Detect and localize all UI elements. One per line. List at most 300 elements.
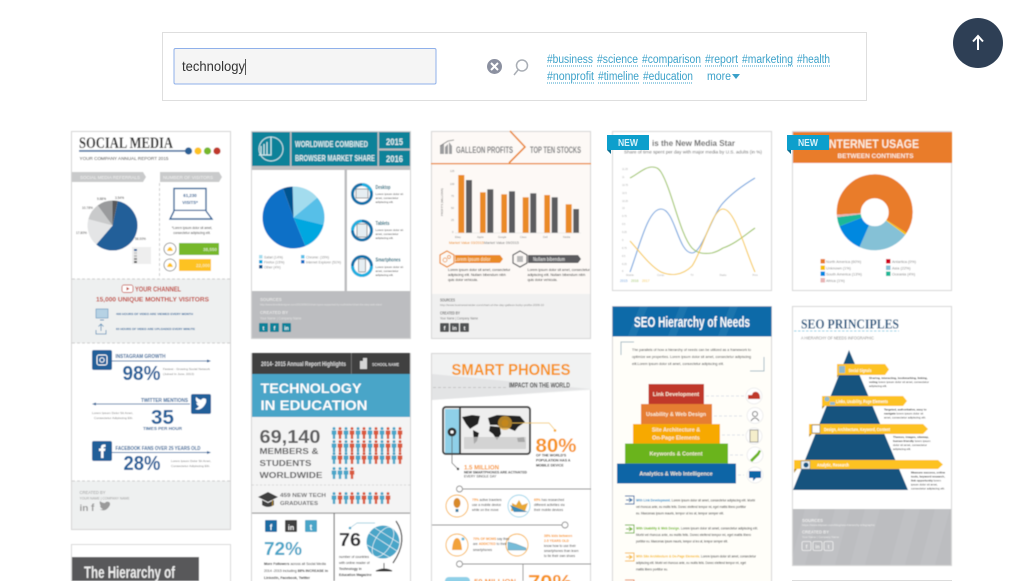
ribbon: design, architecture, keyword, content: Themes, images, sitemap, xyxy=(893,435,929,439)
hashtag links: #timeline xyxy=(598,71,639,83)
list: usability and web design: porttitor eu. Maecenas ipsum mauris, tempor ut leo at, tempor semper elit. xyxy=(636,540,728,544)
heading: technology in education: IN EDUCATION xyxy=(260,398,368,413)
bar chart: stocks xyxy=(440,169,581,245)
header band: 2015 xyxy=(386,137,403,147)
stat: new tech graduates: 459 NEW TECH xyxy=(280,493,326,499)
footer: sources: t xyxy=(263,326,265,332)
callout: lorem ipsum dolor: Lorem ipsum dolor xyxy=(454,257,491,263)
callout: lorem ipsum dolor xyxy=(440,251,511,282)
search panel xyxy=(162,32,866,100)
ribbon: design, architecture, keyword, content xyxy=(809,424,931,452)
header: galleon profits, top ten stocks xyxy=(431,131,591,164)
ribbon: design, architecture, keyword, content: adipiscing elit. xyxy=(893,447,911,451)
stat: facebook fans: Lorem Ipsum Dolor Sit Amet, xyxy=(171,459,211,463)
stat: facebook fans: 28% xyxy=(124,453,161,475)
pyramid connector lines xyxy=(706,396,744,475)
list: site architecture: mattis libero porttitor eu. xyxy=(636,568,668,572)
illustration: tablet with world map xyxy=(443,407,530,454)
bar chart: stocks: Cisco xyxy=(520,235,527,239)
card: browser market share xyxy=(252,132,410,338)
stat: yellow bar: 22,000 xyxy=(196,263,210,268)
stat: twitter mentions xyxy=(92,394,211,431)
y axis labels: 10.25 xyxy=(622,200,629,203)
chart legend: 2017 xyxy=(642,279,650,283)
device: smartphones: adipiscing elit. xyxy=(376,273,394,277)
card: SEO hierarchy of needs xyxy=(612,306,772,581)
stat row: travelers and research: their mobile devices xyxy=(534,508,563,512)
title rule with coloured dots xyxy=(79,147,221,155)
footer: sources: Your Name | Company Name xyxy=(802,535,839,539)
list: site architecture: With Site Architecture & On-Page Elements. Lorem ipsum dolor sit amet, consectetur xyxy=(636,554,757,558)
device: smartphones: amet, consectetur xyxy=(376,269,399,273)
stat: twitter mentions: TIMES PER HOUR xyxy=(143,426,183,431)
ribbon: analytic, research: Analytic, Research xyxy=(817,462,849,468)
stat row: moms and kids: 70% OF MOMS say they xyxy=(473,537,510,541)
ribbon: links, usability, page elements: amet, consectetur adipiscing elit. xyxy=(884,416,926,420)
ribbon: number of visitors: NUMBER OF VISITORS xyxy=(163,175,213,180)
y axis labels: 8.75 xyxy=(622,247,627,250)
stat row: travelers and research: while on the move xyxy=(472,508,499,512)
list: link development: eu. Maecenas ipsum mauris, tempor ut leo at, tempor semper elit. xyxy=(636,512,724,516)
search input xyxy=(174,48,436,84)
footer: sources: t xyxy=(828,544,830,550)
footer: created by xyxy=(72,481,230,529)
stat: instagram growth: INSTAGRAM GROWTH xyxy=(116,354,166,360)
pie labels and legend: 17.80% xyxy=(76,231,87,235)
card: smart phones xyxy=(432,354,591,581)
stat: 80 percent: 80% xyxy=(536,436,577,457)
header: internet usage xyxy=(793,132,952,163)
stat: facebook fans: Consectetur Adipiscing Elit. xyxy=(171,464,210,468)
icon: clear search xyxy=(487,59,502,74)
heading: smart phones: SMART PHONES xyxy=(452,362,571,379)
header: SEO hierarchy of needs: SEO Hierarchy of Needs xyxy=(634,314,750,331)
pyramid of needs: Link Development xyxy=(653,392,699,398)
footer: sources: Your Name | Company Name xyxy=(260,316,302,320)
footer: sources: http://www.businessinsider.com/chart-of-the-day-galleon-lucky-profits-2009-10 xyxy=(440,303,544,307)
bar chart: stocks: 50 xyxy=(451,206,454,210)
y axis labels: 10.75 xyxy=(622,184,629,187)
bar chart: stocks: 25 xyxy=(451,218,454,222)
device: tablets: Tablets xyxy=(376,221,390,227)
y axis labels: 11.25 xyxy=(622,168,628,171)
badge: new xyxy=(607,135,649,154)
card: next thumbnail edge xyxy=(792,580,952,581)
footer: sources xyxy=(252,291,410,338)
footer: sources: f xyxy=(444,326,446,332)
stat: green bar: 38,550 xyxy=(203,247,217,252)
followers text xyxy=(264,562,328,580)
hashtag links xyxy=(547,54,830,83)
pie chart: browsers xyxy=(278,202,309,233)
stat: new tech graduates: GRADUATES xyxy=(280,501,318,507)
callout: nullam bibendum: Nullam bibendum xyxy=(533,257,565,263)
header band: WORLDWIDE COMBINED xyxy=(295,139,368,149)
pyramid of needs: On-Page Elements xyxy=(652,436,700,442)
hashtag links: #report xyxy=(705,54,739,66)
header band: 2016 xyxy=(386,154,403,164)
footer: sources: Your Name | Company Name xyxy=(440,316,478,320)
header: internet usage: INTERNET USAGE xyxy=(826,139,919,151)
callout line: map to 80 percent xyxy=(512,423,556,432)
ribbon: design, architecture, keyword, content: dolor sit amet, consectetur xyxy=(893,443,927,447)
pyramid of needs: Site Architecture & xyxy=(652,428,700,434)
hashtag links: more xyxy=(707,71,731,83)
header: SEO hierarchy of needs xyxy=(612,306,772,336)
stat: yellow bar xyxy=(164,259,211,271)
list: link development: vel rhoncus ante, eu mollis felis. Donec eleifend tempor mi, eget mattis libero porttitor xyxy=(636,505,747,509)
device: smartphones: Smartphones xyxy=(376,258,400,264)
icon: magnifier xyxy=(514,60,528,75)
header band xyxy=(252,132,410,170)
donut legend: North America (60%) xyxy=(826,260,862,264)
search input: technology xyxy=(182,58,245,74)
80 percent caption: POPULATION HAS A xyxy=(536,458,571,462)
header background wedge xyxy=(432,354,591,400)
80 percent caption: MOBILE DEVICE xyxy=(536,464,564,468)
chart legend: 2015 xyxy=(620,279,628,283)
ribbon: analytic, research xyxy=(794,460,945,490)
pie legend xyxy=(259,255,341,270)
hashtag links: #marketing xyxy=(742,54,793,66)
stat row: moms and kids: are ADDICTED to their xyxy=(473,542,508,546)
stat: 76 countries xyxy=(339,523,375,577)
stat: 76 countries: Technology in xyxy=(339,567,362,571)
stat: 50 million xyxy=(445,577,516,581)
stat row: travelers and research xyxy=(446,495,565,517)
pie chart: referrals xyxy=(98,211,127,240)
list: usability and web design: With Usability & Web Design. Lorem ipsum dolor sit amet, consectetur adipiscing elit. xyxy=(636,526,758,530)
stat: members and students: MEMBERS & xyxy=(260,447,319,456)
device: tablets: Lorem ipsum dolor sit xyxy=(376,228,403,232)
badge: new xyxy=(787,135,829,154)
donut legend: Oceania (4%) xyxy=(892,272,916,276)
stat: instagram growth: Fastest - Growing Social Network xyxy=(163,367,211,371)
stat row: moms and kids xyxy=(446,534,579,558)
list: site architecture xyxy=(625,553,757,572)
callout: nullam bibendum: adipiscing elit. Nullam bibendum nibh xyxy=(528,273,585,277)
footer: sources: SOURCES xyxy=(802,518,823,523)
bar chart: stocks: Market Value 09/2015 xyxy=(484,241,519,245)
x axis labels: Comp. xyxy=(657,273,665,277)
heading: technology in education: TECHNOLOGY xyxy=(260,381,362,396)
ribbon: social media referrals: SOCIAL MEDIA REFERRALS xyxy=(80,175,140,180)
footer: sources: http://www.kinetikdesigner.com/2013/09/10/chart-types-supported-by-roofinisher/chart-the-step-web-sites/ xyxy=(260,302,382,306)
pie labels and legend: 10.78% xyxy=(82,206,93,210)
ribbon: social signals xyxy=(837,364,929,390)
footer: sources xyxy=(432,294,590,338)
bar chart: stocks: 125 xyxy=(450,169,455,173)
stat: members and students: WORLDWIDE xyxy=(260,471,323,480)
section: your channel: 400 HOURS OF VIDEO ARE VIEWED EVERY MONTH xyxy=(116,312,193,316)
stat: 1.5 million: 1.5 MILLION xyxy=(464,464,499,472)
hashtag links: #health xyxy=(797,54,830,66)
pictogram: members xyxy=(332,427,402,479)
intro text with brackets: elit.Lorem ipsum dolor sit amet, consectetur adipiscing elit. xyxy=(632,362,724,366)
badge: new: NEW xyxy=(618,138,638,149)
stat: facebook fans: FACEBOOK FANS OVER 25 YEARS OLD xyxy=(116,446,201,452)
section: your channel: 65 HOURS OF VIDEO ARE UPLOADED EVERY MINUTE xyxy=(116,327,195,331)
card: new media star line chart xyxy=(612,132,772,290)
device: smartphones xyxy=(352,256,403,277)
followers text: 2014 -2015 including 88% INCREASE in xyxy=(264,569,328,573)
x axis labels: Radio xyxy=(720,273,727,277)
report header bar xyxy=(252,353,410,374)
y axis labels: 8 xyxy=(622,270,624,273)
stat: members and students xyxy=(260,427,323,480)
footer: sources: in xyxy=(815,544,820,550)
y axis labels: 10 xyxy=(622,207,625,210)
pyramid of needs xyxy=(617,384,736,484)
x axis labels: TV xyxy=(690,273,694,277)
scroll to top button xyxy=(953,18,1003,68)
callout: nullam bibendum xyxy=(513,251,591,282)
stat: 1.5 million: NEW SMARTPHONES ARE ACTIVATED xyxy=(464,470,527,474)
pyramid of needs: Keywords & Content xyxy=(649,452,703,458)
line chart xyxy=(630,167,755,274)
stat: 76 countries: number of countries xyxy=(339,555,369,559)
ribbon: analytic, research: Measure success, online xyxy=(911,470,945,474)
header: galleon profits, top ten stocks: TOP TEN STOCKS xyxy=(530,145,581,156)
chart legend: 2016 xyxy=(631,279,639,283)
80 percent caption xyxy=(536,454,571,468)
donut chart: continents xyxy=(848,185,902,239)
bar chart: stocks: 0 xyxy=(452,230,454,234)
device: desktop: amet, consectetur xyxy=(376,196,399,200)
ribbon: social media referrals xyxy=(72,172,146,182)
heading: social media: SOCIAL MEDIA xyxy=(79,135,174,152)
hashtag links: #nonprofit xyxy=(547,71,595,83)
ribbon: social signals: adipiscing elit. xyxy=(869,384,887,388)
stat: facebook fans xyxy=(92,441,211,475)
device: desktop: Lorem ipsum dolor sit xyxy=(376,192,403,196)
pie labels and legend: 58.00% xyxy=(135,237,146,241)
stat: instagram growth xyxy=(92,350,211,385)
stat row: travelers and research: 65% has researched xyxy=(534,498,564,502)
80 percent caption: OF THE WORLD'S xyxy=(536,454,567,458)
stat row: moms and kids: know how to use their xyxy=(544,544,577,548)
stat row: travelers and research: different activities via xyxy=(534,503,565,507)
heading: new media star: is the New Media Star xyxy=(652,139,735,148)
device: smartphones: Lorem ipsum dolor sit xyxy=(376,265,403,269)
donut legend: Asia (22%) xyxy=(892,266,911,270)
stat: 1.5 million xyxy=(452,436,527,478)
timeline lines xyxy=(432,486,591,581)
donut legend: Antartica (0%) xyxy=(892,260,917,264)
device: desktop xyxy=(352,184,403,204)
bar chart: stocks: Market Value 03/2015 xyxy=(449,241,484,245)
footer: sources xyxy=(790,509,951,565)
section: your channel xyxy=(72,279,230,343)
card: SEO principles xyxy=(790,306,952,566)
device: tablets: adipiscing elit. xyxy=(376,236,394,240)
y axis labels xyxy=(622,168,629,273)
footer: sources: CREATED BY xyxy=(260,310,288,315)
heading: technology in education xyxy=(252,374,410,417)
stat: green bar xyxy=(164,243,219,255)
icon: graduation cap xyxy=(258,492,278,507)
y axis labels: 8.5 xyxy=(622,255,626,258)
footer: sources: https://www.klipsan.com/blog/seo-hierarchy-infographic xyxy=(802,523,876,527)
column divider xyxy=(344,170,347,292)
icon: laptop with visits xyxy=(170,188,212,219)
pie legend: Internet Explorer (51%) xyxy=(306,260,341,264)
ribbon: analytic, research: consectetur adipiscing elit. xyxy=(911,486,945,490)
callout: lorem ipsum dolor: Lorem ipsum dolor sit amet, consectetur xyxy=(448,268,511,272)
ribbon: design, architecture, keyword, content: human-friendly lorem ipsum xyxy=(893,439,931,443)
hashtag links: #business xyxy=(547,54,593,66)
stat: instagram growth: (Joined In June, 2013) xyxy=(163,372,194,376)
list: usability and web design xyxy=(625,525,758,544)
card: social media xyxy=(72,132,230,530)
stat: twitter mentions: TWITTER MENTIONS xyxy=(141,398,189,404)
callout: nullam bibendum: quis dolor vehicula. xyxy=(528,278,557,282)
intro text with brackets: The parallels of how a hierarchy of needs can be utilized as a framework to xyxy=(632,348,751,352)
header: internet usage: BETWEEN CONTINENTS xyxy=(838,154,914,160)
card: the hierarchy of xyxy=(72,544,230,581)
ribbon: social signals: voting lorem ipsum dolor sit amet, consectetur xyxy=(869,380,929,384)
donut legend: Unknown (1%) xyxy=(826,266,852,270)
bar chart: stocks: Ebay xyxy=(455,235,462,239)
section: your channel: YOUR CHANNEL xyxy=(135,286,182,294)
y axis labels: 9.75 xyxy=(622,215,627,218)
hashtag links: #education xyxy=(643,71,693,83)
stat: 72 percent: 72% xyxy=(264,539,302,559)
device: desktop: Desktop xyxy=(376,185,391,191)
visitors note: consectetur adipiscing elit. xyxy=(173,231,211,235)
stat: new tech graduates xyxy=(280,493,326,507)
y axis labels: 10.5 xyxy=(622,192,627,195)
ribbon: design, architecture, keyword, content: Design, Architecture, Keyword, Content xyxy=(824,427,890,433)
footer: created by: YOUR NAME | COMPANY NAME xyxy=(80,496,130,500)
hashtag links: #science xyxy=(597,54,638,66)
ribbon: analytic, research: tools, keyword research, xyxy=(911,474,945,478)
social icons xyxy=(265,520,317,532)
ribbon: number of visitors xyxy=(160,172,222,182)
bar chart: stocks: Dell xyxy=(543,235,548,239)
bar chart: stocks: 75 xyxy=(451,194,454,198)
card: technology in education xyxy=(252,353,410,581)
icon: laptop with visits: VISITS* xyxy=(182,200,198,205)
y axis labels: 9 xyxy=(622,239,624,242)
stat row: moms and kids: smartphones than learn xyxy=(544,549,579,553)
ribbon: analytic, research: link opportunity lorem xyxy=(911,478,941,482)
y axis labels: 11 xyxy=(622,176,625,179)
chart subtitle: Share of time spent per day with major media by U.S. adults (in %) xyxy=(624,150,763,154)
footer: sources: SOURCES xyxy=(260,297,282,302)
chart legend xyxy=(620,279,650,283)
device: tablets xyxy=(352,221,403,240)
list: link development xyxy=(625,496,755,516)
stat: twitter mentions: Lorem Ipsum Dolor Sit Amet, xyxy=(92,411,133,415)
footer: sources: in xyxy=(452,326,457,332)
report header bar: SCHOOL NAME xyxy=(372,362,399,367)
pie labels and legend: 3.54% xyxy=(115,196,124,200)
card: galleon profits xyxy=(431,131,591,338)
pie legend: Firefox (15%) xyxy=(264,260,284,264)
visitors note: *Lorem ipsum dolor sit amet, xyxy=(172,226,212,230)
callout: lorem ipsum dolor: adipiscing elit. Nullam bibendum nibh xyxy=(448,273,506,277)
ribbon: links, usability, page elements: Targeted, authoritative, easy to xyxy=(884,408,927,412)
badge: new: NEW xyxy=(798,138,818,149)
social icons: t xyxy=(310,523,313,532)
icon: laptop with visits: 61,230 xyxy=(183,193,197,198)
subtitle: YOUR COMPANY ANNUAL REPORT 2015 xyxy=(80,156,169,161)
ribbon: social signals: Sharing, interacting, bookmarking, linking, xyxy=(869,376,928,380)
stat: members and students: STUDENTS xyxy=(260,459,312,468)
list: site architecture: adipiscing elit. Morbi vel rhoncus ante, eu mollis felis. Donec eleifend tempor mi, eget xyxy=(636,561,746,565)
visitors note xyxy=(172,226,212,235)
subtitle: impact on the world: IMPACT ON THE WORLD xyxy=(509,382,570,390)
stat row: moms and kids: 2-5 YEARS OLD xyxy=(544,539,569,543)
pie legend: Safari (14%) xyxy=(264,256,283,260)
x axis labels: Print xyxy=(752,273,758,277)
bar chart: stocks: Nvidia xyxy=(563,235,571,239)
footer: created by: CREATED BY xyxy=(80,490,106,495)
report header bar: 2014- 2015 Annual Report Highlights xyxy=(261,361,346,368)
footer: sources: CREATED BY xyxy=(440,310,460,316)
icon: globe xyxy=(366,521,402,571)
pie legend: Other (4%) xyxy=(264,266,281,270)
ribbon: analytic, research: ipsum dolor sit amet, xyxy=(911,482,938,486)
x axis labels xyxy=(626,273,758,277)
social icons: f xyxy=(270,523,273,532)
stat row: moms and kids: to tie their own shoes xyxy=(544,554,576,558)
stat: twitter mentions: 35 xyxy=(151,407,174,429)
bar chart: stocks: 100 xyxy=(450,182,455,186)
followers text: LinkedIn, Facebook, Twitter xyxy=(264,576,311,580)
footer: sources: f xyxy=(274,326,276,332)
intro text with brackets: optimize we properties. Lorem ipsum dolor sit amet, consectetur adipiscing xyxy=(632,355,751,359)
footer: created by: f xyxy=(91,503,95,514)
ribbon: links, usability, page elements xyxy=(822,396,927,420)
pie labels and legend xyxy=(76,196,151,264)
header band: BROWSER MARKET SHARE xyxy=(295,153,375,163)
callout: nullam bibendum: Lorem ipsum dolor sit amet, consectetur xyxy=(528,268,591,272)
bar chart: stocks: Apple xyxy=(477,235,484,239)
subtitle: A HIERARCHY OF NEEDS INFOGRAPHIC xyxy=(801,336,875,340)
card: internet usage xyxy=(792,132,952,290)
intro text with brackets xyxy=(621,342,764,371)
stat: 76 countries: with online reader of xyxy=(339,561,370,565)
y axis labels: 9.25 xyxy=(622,231,627,234)
x axis labels: Mobile xyxy=(626,273,634,277)
bar chart: stocks: Google xyxy=(498,235,507,239)
hashtag links: #comparison xyxy=(642,54,701,66)
footer: sources: SOURCES xyxy=(440,298,455,302)
y axis labels: 9.5 xyxy=(622,223,626,226)
donut legend: Africa (1%) xyxy=(826,279,846,283)
bar chart: stocks: PROFITS (MILLIONS) xyxy=(440,188,444,216)
list: usability and web design: Morbi vel rhoncus ante, eu mollis felis. Donec eleifend tempor mi, eget mattis libero xyxy=(636,533,751,537)
ribbon: links, usability, page elements: navigate lorem ipsum dolor sit xyxy=(884,412,923,416)
pyramid icons xyxy=(746,388,763,483)
pie labels and legend: 9.88% xyxy=(97,197,106,201)
header: galleon profits, top ten stocks: GALLEON PROFITS xyxy=(456,145,513,156)
stat row: moms and kids: smartphones xyxy=(473,548,492,552)
stat row: moms and kids: 38% kids between xyxy=(544,534,572,538)
stat row: travelers and research: use a mobile device xyxy=(472,503,501,507)
y axis labels: 8.25 xyxy=(622,263,627,266)
list: link development: With Link Development. Lorem ipsum dolor sit amet, consectetur adipiscing elit. Morbi xyxy=(636,498,755,502)
list marker: next item xyxy=(625,580,634,581)
stat: members and students: 69,140 xyxy=(260,427,320,447)
heading: SEO principles: SEO PRINCIPLES xyxy=(801,316,899,332)
donut legend xyxy=(820,259,917,283)
stat: twitter mentions: Consectetur Adipiscing Elit. xyxy=(94,416,133,420)
ribbon: links, usability, page elements: Links, Usability, Page Elements xyxy=(836,399,888,405)
callout: lorem ipsum dolor: quis dolor vehicula. xyxy=(448,278,478,282)
